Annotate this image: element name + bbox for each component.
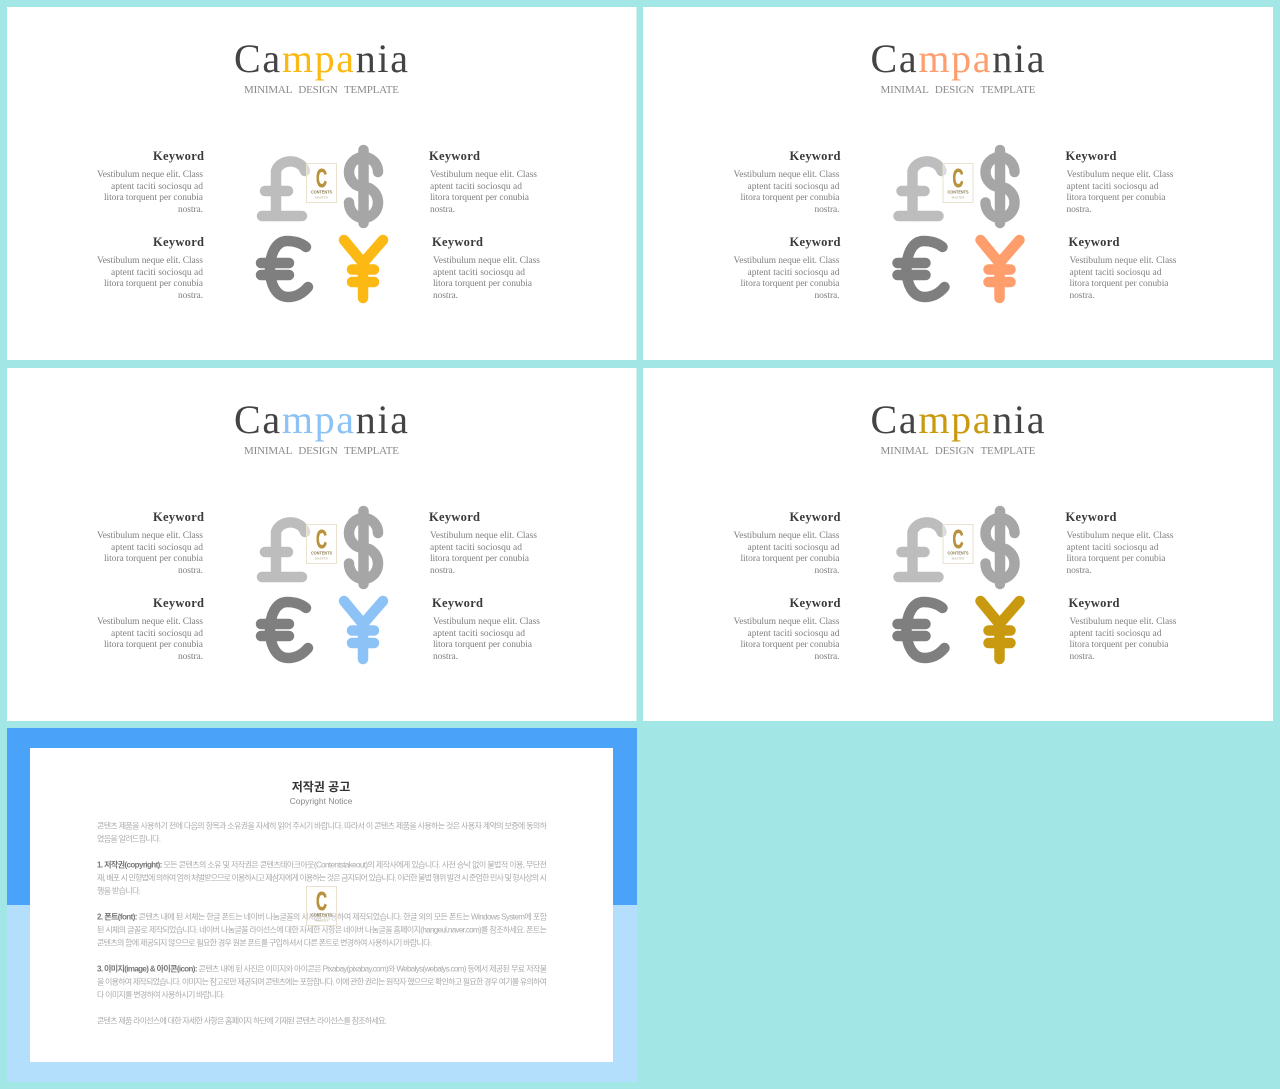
panel: gold variant	[643, 368, 1273, 721]
icon: dollar	[986, 511, 1014, 584]
text block: euro: nostra.	[814, 291, 840, 301]
text block: euro: Vestibulum neque elit. Class	[97, 256, 203, 266]
text block: intro: 콘텐츠 제품을 사용하기 전에 다음의 항목과 소유권을 자세히 읽어 주시기 바랍니다. 따라서 이 콘텐츠 제품을 사용하는 것은 사용자 계약의 보증에 동의하	[97, 820, 548, 830]
text block: pound: nostra.	[814, 205, 840, 215]
text block: euro: litora torquent per conubia	[740, 279, 840, 289]
text block: pound	[97, 149, 204, 215]
text block: image and icon: 다 이미지를 변경하여 사용하시기 바랍니다.	[97, 990, 225, 1000]
text block: euro: Vestibulum neque elit. Class	[97, 617, 203, 627]
text block: yen: Keyword	[1068, 596, 1120, 610]
watermark logo	[306, 886, 336, 926]
text block: euro: Keyword	[790, 235, 841, 249]
text block: pound	[734, 149, 841, 215]
watermark logo: CONTENTS	[311, 912, 332, 918]
text block: pound: Keyword	[790, 149, 841, 163]
text block: euro: nostra.	[178, 291, 203, 301]
watermark logo: MASTER	[952, 556, 965, 560]
text block: copyright: 재, 배포 시 민형법에 의하여 엄히 처벌받으므로 이용하시고 제삼자에게 이용하는 것은 금지되어 있습니다. 이러한 불법 행위 발견 시 준엄한 민사 및 형사상의 시	[97, 872, 547, 882]
text block: dollar: Vestibulum neque elit. Class	[1066, 531, 1174, 541]
panel: orange variant	[643, 7, 1273, 360]
text block: euro	[734, 235, 841, 301]
text block: pound: Vestibulum neque elit. Class	[97, 170, 203, 180]
text block: pound: Keyword	[153, 149, 204, 163]
text block: dollar: nostra.	[430, 566, 455, 576]
panel: yellow variant	[7, 7, 636, 360]
text block: dollar: litora torquent per conubia	[430, 193, 530, 203]
text block: euro: Keyword	[790, 596, 841, 610]
subtitle: MINIMAL DESIGN TEMPLATE	[880, 445, 1036, 457]
text block: euro: aptent taciti sociosqu ad	[111, 629, 203, 639]
icon: yen	[344, 240, 383, 298]
watermark logo: CONTENTS	[948, 190, 968, 194]
text block: euro: Keyword	[153, 235, 204, 249]
text block: pound: aptent taciti sociosqu ad	[111, 182, 203, 192]
text block: pound: aptent taciti sociosqu ad	[748, 543, 840, 553]
watermark logo: C	[316, 524, 327, 554]
text block: dollar: aptent taciti sociosqu ad	[1066, 182, 1159, 192]
text block: font: 된 시체의 글꼴로 제작되었습니다. 네이버 나눔글꼴 라이선스에 대한 자세한 사항은 네이버 나눔글꼴 홈페이지(hangeul.naver.com)를 참조하세요. 폰트는	[97, 924, 547, 934]
text block: pound: litora torquent per conubia	[740, 554, 840, 564]
text block: yen: aptent taciti sociosqu ad	[1070, 629, 1162, 639]
text block: euro: Vestibulum neque elit. Class	[734, 256, 840, 266]
text block: dollar: aptent taciti sociosqu ad	[1066, 543, 1159, 553]
text block: euro: litora torquent per conubia	[104, 279, 204, 289]
text block: pound: Vestibulum neque elit. Class	[734, 170, 840, 180]
text block: yen: nostra.	[433, 291, 458, 301]
text block: pound: Vestibulum neque elit. Class	[734, 531, 840, 541]
text block: euro: aptent taciti sociosqu ad	[748, 629, 840, 639]
text block: dollar: nostra.	[1066, 566, 1092, 576]
heading: copyright notice	[290, 779, 353, 806]
text block: pound: Keyword	[153, 510, 204, 524]
text block: image and icon: 3. 이미지(image) & 아이콘(icon): 콘텐츠 내에 된 사진은 이미지와 아이콘은 Pixabay(pixabay.com)와 Webalys(webalys.com) 등에서 제공된 무료 저작물	[97, 964, 547, 974]
title: Campania	[234, 397, 408, 442]
icon: euro	[261, 241, 308, 297]
text block: dollar: nostra.	[1066, 205, 1092, 215]
icon: dollar	[349, 511, 378, 584]
panel: copyright notice	[7, 728, 637, 1082]
text block: dollar: litora torquent per conubia	[430, 554, 530, 564]
icon: dollar	[986, 150, 1014, 223]
text block: copyright: 행을 받습니다.	[97, 886, 141, 896]
text block: yen: litora torquent per conubia	[433, 279, 533, 289]
text block: dollar	[1066, 510, 1174, 576]
text block: dollar	[429, 510, 537, 576]
watermark logo: C	[316, 886, 327, 916]
text block: yen: litora torquent per conubia	[433, 640, 533, 650]
subtitle: MINIMAL DESIGN TEMPLATE	[244, 445, 399, 457]
text block: intro	[97, 820, 548, 844]
text block: yen: nostra.	[1070, 291, 1094, 301]
text block: dollar: nostra.	[430, 205, 455, 215]
text block: yen: Vestibulum neque elit. Class	[1070, 256, 1177, 266]
watermark logo: MASTER	[315, 556, 329, 560]
text block: pound: aptent taciti sociosqu ad	[111, 543, 203, 553]
watermark logo: C	[316, 163, 327, 193]
watermark logo	[306, 524, 336, 564]
text block: pound: nostra.	[178, 566, 203, 576]
icon: yen	[980, 240, 1020, 298]
text block: pound	[97, 510, 204, 576]
text block: euro: aptent taciti sociosqu ad	[748, 268, 840, 278]
subtitle: MINIMAL DESIGN TEMPLATE	[244, 84, 399, 96]
text block: font: 콘텐츠의 함에 제공되지 않으므로 필요한 경우 원본 폰트를 구입하셔서 다른 폰트로 변경하여 사용하시기 바랍니다.	[97, 938, 432, 948]
icon: pound	[262, 522, 305, 577]
text block: euro: litora torquent per conubia	[104, 640, 204, 650]
text block: pound: nostra.	[178, 205, 203, 215]
text block: euro	[97, 596, 204, 662]
text block: euro: litora torquent per conubia	[740, 640, 840, 650]
watermark logo: MASTER	[315, 196, 329, 200]
text block: yen	[432, 596, 540, 662]
text block: yen: Vestibulum neque elit. Class	[1070, 617, 1177, 627]
text block: yen: Keyword	[1068, 235, 1120, 249]
text block: yen	[432, 235, 540, 301]
text block: euro: Vestibulum neque elit. Class	[734, 617, 840, 627]
text block: dollar: Keyword	[1066, 510, 1117, 524]
watermark logo: C	[952, 163, 964, 193]
text block: license note: 콘텐츠 제품 라이선스에 대한 자세한 사항은 홈페이지 하단에 기재된 콘텐츠 라이선스를 참조하세요.	[97, 1016, 387, 1026]
text block: yen: nostra.	[1070, 652, 1094, 662]
text block: dollar: Keyword	[429, 510, 480, 524]
text block: yen: aptent taciti sociosqu ad	[433, 629, 525, 639]
text block: copyright: 1. 저작권(copyright): 모든 콘텐츠의 소유 및 저작권은 콘텐츠테이크아웃(Contentstakeout)의 제작사에게 있습니다. 사전 승낙 없이 불법적 이용, 무단전	[97, 860, 547, 870]
text block: pound: litora torquent per conubia	[104, 554, 204, 564]
text block: dollar: Vestibulum neque elit. Class	[1066, 170, 1174, 180]
text block: yen: Vestibulum neque elit. Class	[433, 617, 540, 627]
text block: font: 2. 폰트(font): 콘텐츠 내에 된 서체는 한글 폰트는 네이버 나눔글꼴의 서체를 사용하여 제작되었습니다. 한글 외의 모든 폰트는 Windows System에 포함	[97, 912, 548, 922]
watermark logo: MASTER	[315, 918, 329, 922]
heading: copyright notice: Copyright Notice	[290, 796, 353, 806]
watermark logo	[943, 163, 973, 202]
icon: euro	[261, 602, 308, 658]
text block: dollar: litora torquent per conubia	[1066, 554, 1166, 564]
text block: intro: 였음을 알려드립니다.	[97, 834, 161, 844]
icon: pound	[262, 161, 305, 216]
text block: pound: aptent taciti sociosqu ad	[748, 182, 840, 192]
text block: yen: litora torquent per conubia	[1070, 640, 1169, 650]
text block: copyright	[97, 860, 547, 896]
text block: font	[97, 912, 548, 948]
text block: yen	[1068, 596, 1177, 662]
icon: yen	[344, 601, 383, 659]
panel: blue variant	[7, 368, 636, 721]
text block: dollar: Keyword	[429, 149, 480, 163]
text block: dollar: Vestibulum neque elit. Class	[430, 531, 537, 541]
watermark logo: CONTENTS	[311, 190, 332, 194]
watermark logo	[306, 163, 336, 202]
text block: pound: Keyword	[790, 510, 841, 524]
text block: euro	[734, 596, 841, 662]
text block: yen: aptent taciti sociosqu ad	[1070, 268, 1162, 278]
text block: dollar: Vestibulum neque elit. Class	[430, 170, 537, 180]
text block: dollar	[429, 149, 537, 215]
text block: pound: nostra.	[814, 566, 840, 576]
icon: euro	[898, 241, 944, 297]
text block: dollar	[1066, 149, 1174, 215]
text block: euro	[97, 235, 204, 301]
text block: yen: litora torquent per conubia	[1070, 279, 1169, 289]
text block: pound: Vestibulum neque elit. Class	[97, 531, 203, 541]
text block: yen: Vestibulum neque elit. Class	[433, 256, 540, 266]
text block: dollar: litora torquent per conubia	[1066, 193, 1166, 203]
heading: copyright notice: 저작권 공고	[292, 779, 350, 794]
text block: dollar: aptent taciti sociosqu ad	[430, 543, 522, 553]
text block: yen	[1068, 235, 1177, 301]
watermark logo: CONTENTS	[948, 550, 968, 556]
title: Campania	[234, 36, 408, 81]
icon: dollar	[349, 150, 378, 223]
icon: pound	[898, 522, 942, 577]
subtitle: MINIMAL DESIGN TEMPLATE	[880, 84, 1036, 96]
title: Campania	[870, 397, 1045, 442]
text block: pound	[734, 510, 841, 576]
text block: yen: Keyword	[432, 235, 483, 249]
text block: image and icon: 을 이용하여 제작되었습니다. 이미지는 참고로만 제공되며 콘텐츠에는 포함합니다. 이에 관한 권리는 원작자 했으므로 확인하고 필요한 경우 여기를 유의하여	[97, 976, 547, 986]
watermark logo: MASTER	[952, 196, 965, 200]
text block: dollar: aptent taciti sociosqu ad	[430, 182, 522, 192]
watermark logo	[943, 524, 973, 564]
watermark logo: CONTENTS	[311, 550, 332, 556]
icon: euro	[898, 602, 944, 658]
text block: yen: nostra.	[433, 652, 458, 662]
text block: euro: nostra.	[814, 652, 840, 662]
text block: yen: Keyword	[432, 596, 483, 610]
text block: euro: aptent taciti sociosqu ad	[111, 268, 203, 278]
text block: euro: Keyword	[153, 596, 204, 610]
text block: euro: nostra.	[178, 652, 203, 662]
text block: pound: litora torquent per conubia	[104, 193, 204, 203]
text block: dollar: Keyword	[1066, 149, 1117, 163]
icon: pound	[898, 161, 942, 216]
watermark logo: C	[952, 524, 964, 554]
text block: pound: litora torquent per conubia	[740, 193, 840, 203]
text block: image and icon	[97, 964, 547, 1000]
title: Campania	[870, 36, 1045, 81]
icon: yen	[980, 601, 1020, 659]
text block: yen: aptent taciti sociosqu ad	[433, 268, 525, 278]
